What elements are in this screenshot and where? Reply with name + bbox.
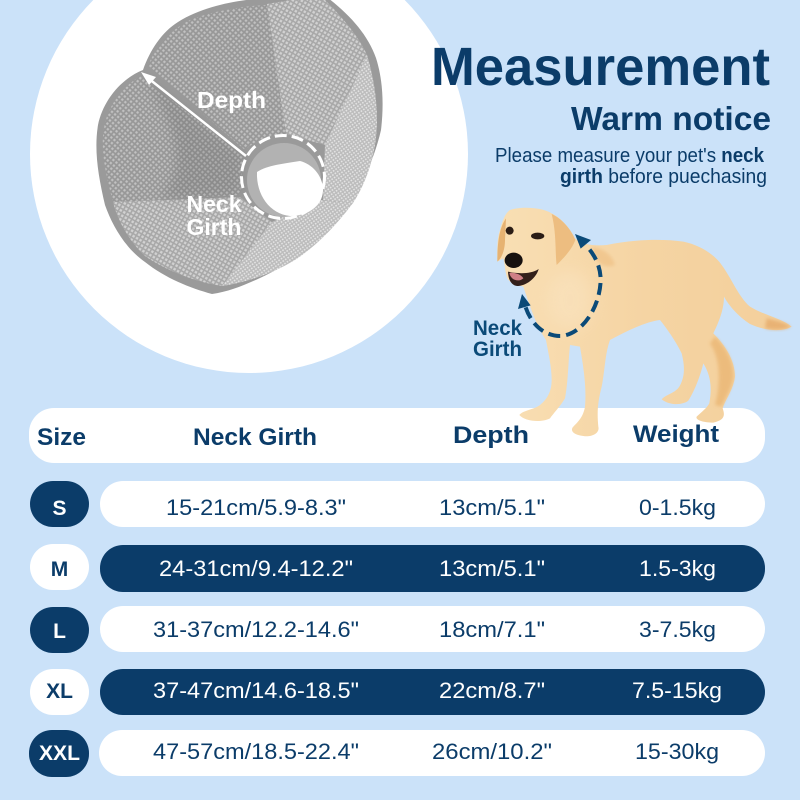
row: size XXL: 26cm/10.2" [432,739,552,764]
depth arrow [141,72,246,156]
collar neck opening [247,143,321,217]
row: size XXL [29,730,765,777]
collar product illustration [96,0,383,294]
dog rear leg shading [710,337,733,407]
label: neck girth on collar [186,191,242,240]
dog shoulder shading [592,247,615,266]
label: neck girth on collar: Neck [186,191,242,217]
row: size XXL: 15-30kg [635,739,719,764]
row: size M: 13cm/5.1" [439,556,545,581]
label: depth: Depth [197,87,266,113]
dog eyes [506,227,544,239]
dog chest highlight [547,270,593,330]
row: size M: M [51,558,68,581]
row: size L: 18cm/7.1" [439,617,545,642]
row: size XL: 7.5-15kg [632,678,722,703]
header: size: Size [37,424,86,451]
row: size XXL: 47-57cm/18.5-22.4" [153,739,359,764]
row: size S: 0-1.5kg [639,495,716,520]
row: size S: 15-21cm/5.9-8.3" [166,495,346,520]
white circle backdrop [30,0,468,373]
row: size XL: 37-47cm/14.6-18.5" [153,678,359,703]
row: size XL [30,669,765,715]
label: neck girth on collar: Girth [186,214,242,240]
dog tail tip shading [765,318,791,330]
dog mouth [508,269,539,286]
label: neck girth by dog: Girth [473,338,522,361]
header: depth: Depth [453,422,529,449]
dog ear [552,214,575,265]
row: size M [30,544,765,592]
header: weight: Weight [633,421,719,448]
notice text: girth before puechasing [560,166,767,188]
row: size L [30,606,765,653]
neck girth dashed arrow [526,245,601,336]
arrowhead: upper [575,234,591,249]
notice text: Please measure your pet's neck [495,145,765,167]
row: size XL: 22cm/8.7" [439,678,545,703]
dog illustration [497,208,792,436]
row: size L: 3-7.5kg [639,617,716,642]
table header row [29,408,765,463]
title: Measurement [431,37,770,97]
row: size M: 1.5-3kg [639,556,716,581]
subtitle: Warm notice [571,100,771,137]
header: neck girth: Neck Girth [193,424,317,451]
row: size S: 13cm/5.1" [439,495,545,520]
label: neck girth by dog: Neck [473,317,522,340]
row: size S: S [52,497,67,520]
row: size XL: XL [46,680,73,703]
neck girth dashed ring [242,136,324,218]
row: size L: L [53,620,66,643]
collar dark shading near opening [143,76,243,199]
row: size L: 31-37cm/12.2-14.6" [153,617,359,642]
row: size XXL: XXL [39,742,80,765]
arrowhead: lower [518,294,531,309]
label: neck girth by dog [473,317,522,361]
dog far ear [497,218,506,262]
row: size M: 24-31cm/9.4-12.2" [159,556,353,581]
dog nose [505,253,523,268]
row: size S [30,481,765,527]
notice text [495,145,767,188]
